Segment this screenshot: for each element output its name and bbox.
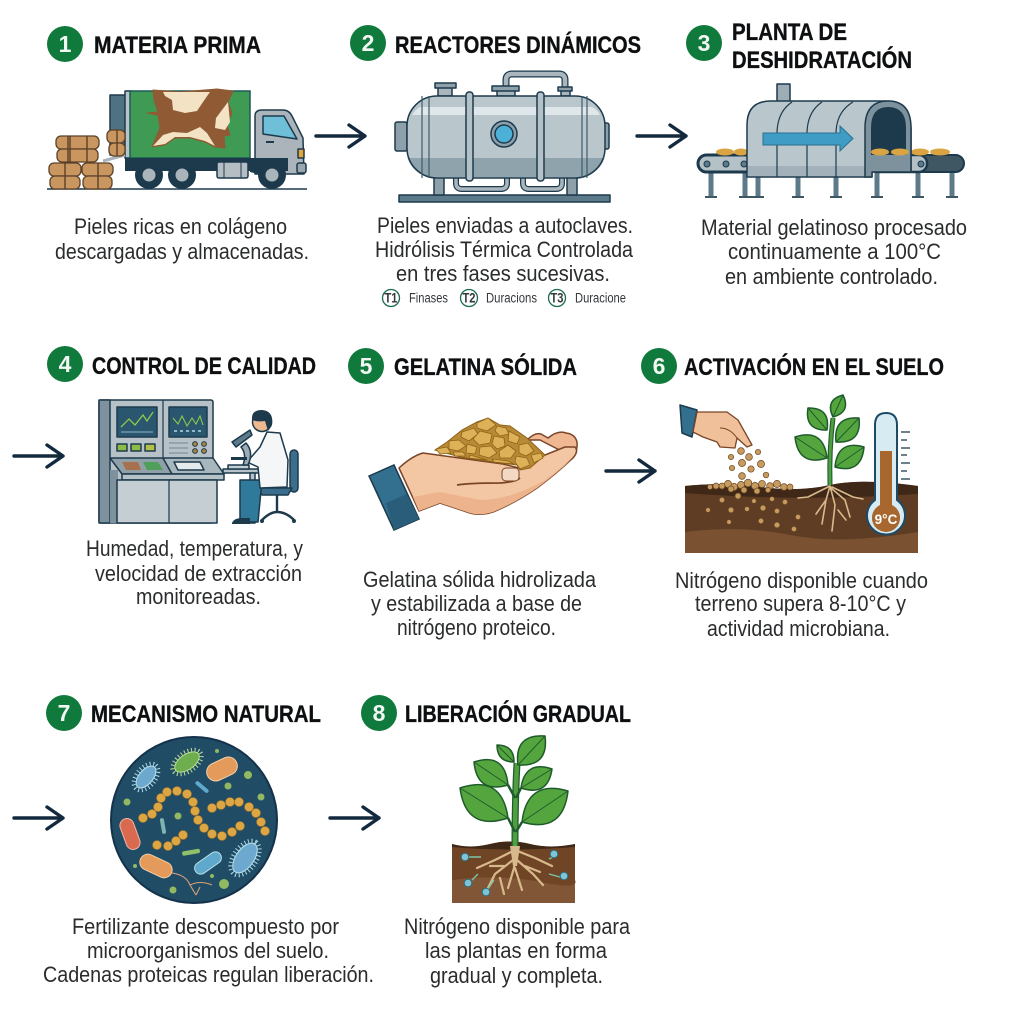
heading 3: PLANTA DE <box>732 19 847 46</box>
panel: step 7 mecanismo natural <box>43 695 374 987</box>
text 2 <box>375 213 634 286</box>
phase tags T1 T2 T3: Finases <box>409 290 448 306</box>
icon: soil, plant, seeds, thermometer: 9°C <box>875 512 898 527</box>
arrow 7 to 8 <box>330 807 379 829</box>
text 5: Gelatina sólida hidrolizada <box>363 567 597 592</box>
phase tags T1 T2 T3: Duracions <box>486 290 537 306</box>
panel: step 8 liberacion gradual <box>361 695 631 988</box>
text 5: y estabilizada a base de <box>371 591 582 616</box>
text 3: Material gelatinoso procesado <box>701 215 967 240</box>
heading 3 <box>732 19 912 74</box>
badge 4 <box>47 346 83 382</box>
text 1 <box>55 214 309 264</box>
text 7: Fertilizante descompuesto por <box>72 914 339 939</box>
text 5 <box>363 567 597 640</box>
arrow 2 to 3 <box>637 125 686 147</box>
text 5: nitrógeno proteico. <box>397 615 556 640</box>
heading 1: MATERIA PRIMA <box>94 32 261 59</box>
text 3 <box>701 215 967 289</box>
badge 2 <box>350 25 386 61</box>
icon: dehydration tunnel <box>698 84 964 197</box>
badge 8 <box>361 695 397 731</box>
text 2: Hidrólisis Térmica Controlada <box>375 237 634 262</box>
heading 6: ACTIVACIÓN EN EL SUELO <box>684 353 944 381</box>
text 1: descargadas y almacenadas. <box>55 239 309 264</box>
badge 1 <box>47 26 83 62</box>
badge 5: 5 <box>360 353 373 379</box>
text 4 <box>86 536 303 609</box>
badge 6 <box>641 348 677 384</box>
badge 8: 8 <box>373 700 386 726</box>
badge 7 <box>46 695 82 731</box>
text 7 <box>43 914 374 987</box>
badge 3: 3 <box>698 30 710 56</box>
text 8: las plantas en forma <box>425 938 608 963</box>
panel: step 5 gelatina solida <box>348 348 597 640</box>
phase tags T1 T2 T3: T2 <box>462 290 476 306</box>
text 1: Pieles ricas en colágeno <box>74 214 287 239</box>
heading 8: LIBERACIÓN GRADUAL <box>405 700 631 728</box>
icon: control console and scientist <box>99 400 298 524</box>
panel: step 1 materia prima <box>47 26 309 264</box>
badge 4: 4 <box>59 351 72 377</box>
panel: step 2 reactores <box>350 25 641 306</box>
icon: reactor tank <box>395 74 610 202</box>
badge 2: 2 <box>362 30 374 56</box>
text 8: gradual y completa. <box>430 963 603 988</box>
badge 1: 1 <box>59 31 72 57</box>
text 2: Pieles enviadas a autoclaves. <box>377 213 633 238</box>
heading 4: CONTROL DE CALIDAD <box>92 353 316 380</box>
arrow into step 4 <box>14 445 63 467</box>
phase tags T1 T2 T3: T1 <box>384 290 398 306</box>
text 4: Humedad, temperatura, y <box>86 536 303 561</box>
phase tags T1 T2 T3: Duracione <box>575 290 626 306</box>
arrow into step 7 <box>14 807 63 829</box>
text 6 <box>675 568 928 641</box>
text 7: Cadenas proteicas regulan liberación. <box>43 962 374 987</box>
phase tags T1 T2 T3 <box>382 290 626 306</box>
text 4: monitoreadas. <box>136 584 261 609</box>
arrow 5 to 6 <box>606 460 655 482</box>
badge 3 <box>686 25 722 61</box>
icon: soil, plant, seeds, thermometer <box>680 395 918 553</box>
badge 7: 7 <box>58 700 70 726</box>
heading 3: DESHIDRATACIÓN <box>732 46 912 74</box>
heading 5: GELATINA SÓLIDA <box>394 353 577 381</box>
text 8: Nitrógeno disponible para <box>404 914 631 939</box>
text 6: terreno supera 8-10°C y <box>695 591 906 616</box>
text 3: continuamente a 100°C <box>728 239 941 264</box>
panel: step 6 activacion en el suelo <box>641 348 944 641</box>
text 7: microorganismos del suelo. <box>87 938 329 963</box>
icon: microbes in a petri circle <box>111 737 277 903</box>
phase tags T1 T2 T3: T3 <box>550 290 564 306</box>
panel: step 4 control de calidad <box>47 346 316 609</box>
badge 6: 6 <box>653 353 665 379</box>
badge 5 <box>348 348 384 384</box>
icon: plant with roots releasing nitrogen <box>452 736 576 903</box>
heading 2: REACTORES DINÁMICOS <box>395 31 641 59</box>
text 4: velocidad de extracción <box>95 561 302 586</box>
icon: hand holding gelatine granules <box>369 418 577 530</box>
arrow 1 to 2 <box>316 125 365 147</box>
panel: step 3 deshidratacion <box>686 19 967 289</box>
icon: truck with hide and bales <box>47 89 307 189</box>
text 6: actividad microbiana. <box>707 616 890 641</box>
text 6: Nitrógeno disponible cuando <box>675 568 928 593</box>
text 3: en ambiente controlado. <box>725 264 938 289</box>
text 8 <box>404 914 631 988</box>
text 2: en tres fases sucesivas. <box>396 261 610 286</box>
heading 7: MECANISMO NATURAL <box>91 701 321 728</box>
